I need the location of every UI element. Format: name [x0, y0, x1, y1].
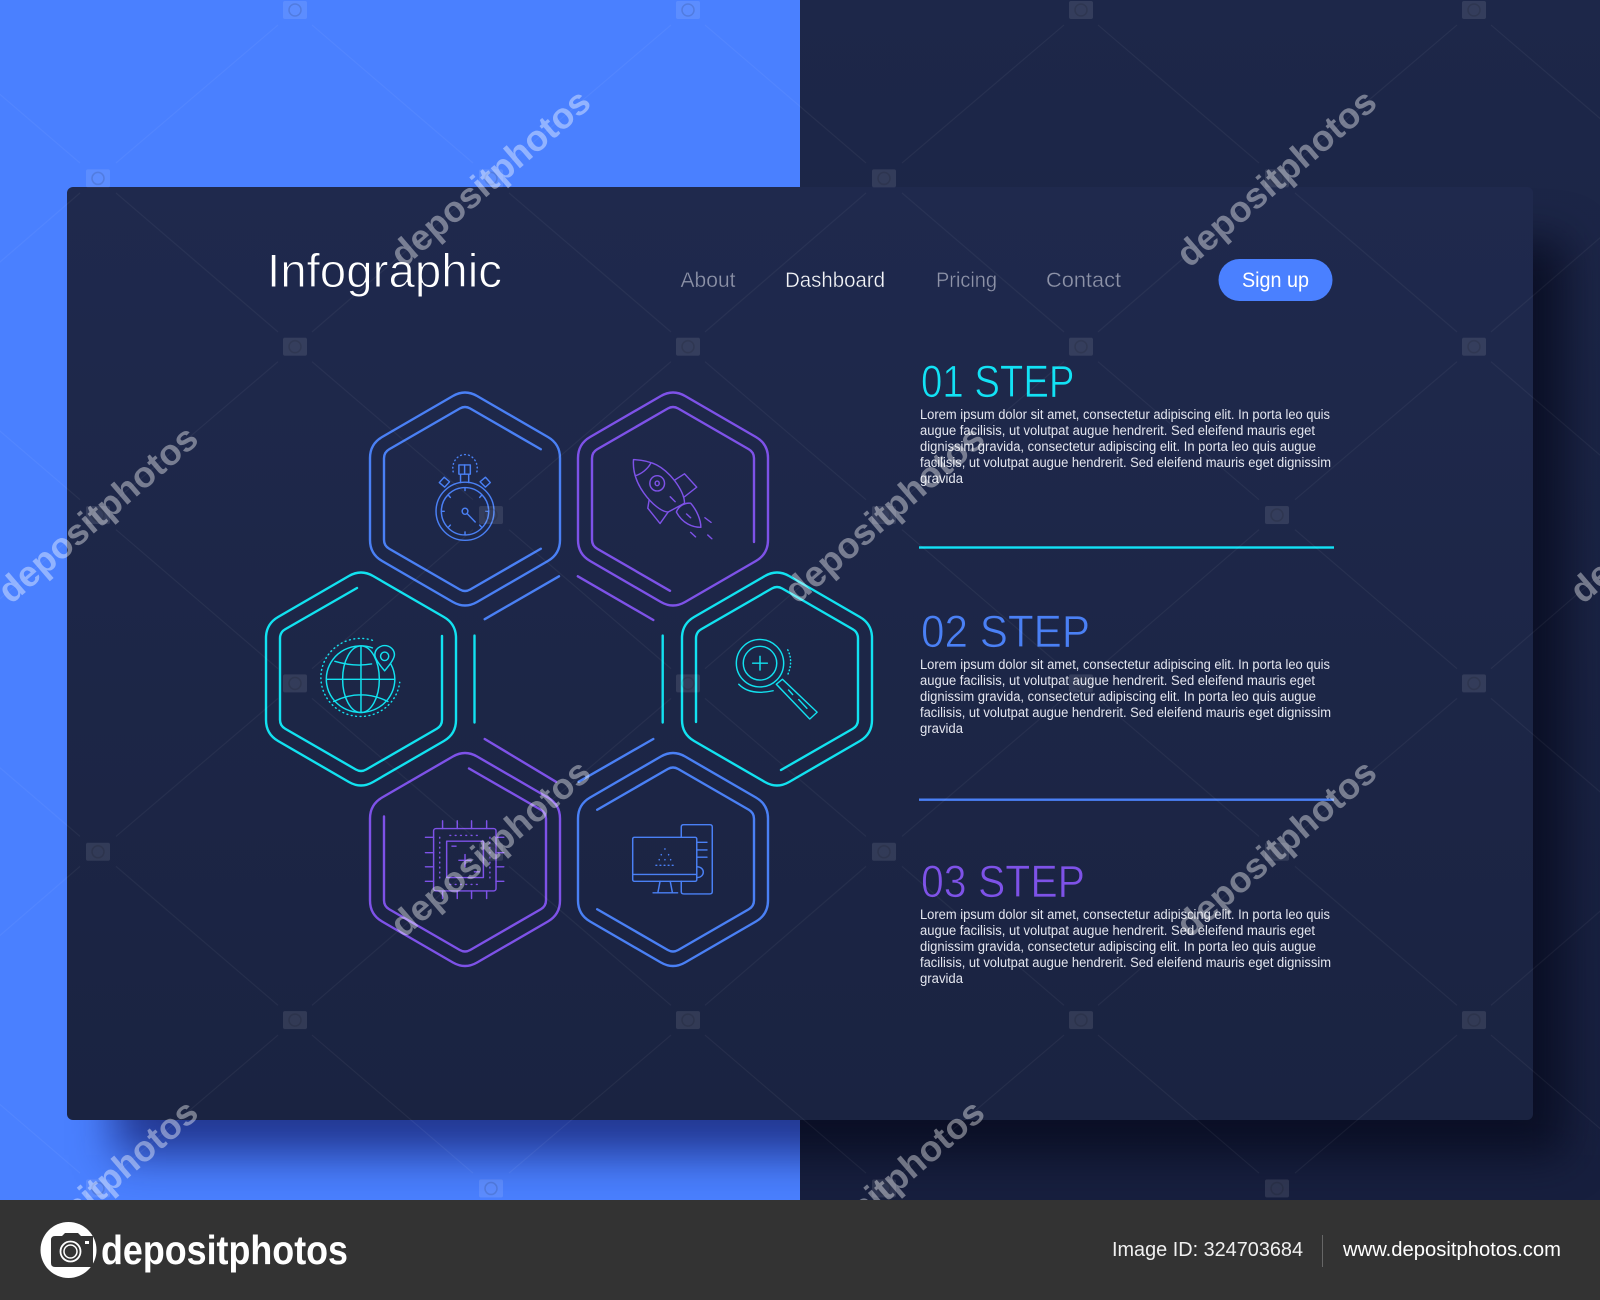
step 3: [920, 856, 1331, 986]
footer logo: [40, 1222, 348, 1278]
footer website: www.depositphotos.com: [1342, 1239, 1561, 1261]
background: dark right half: [800, 0, 1600, 1200]
button: sign up: Sign up: [1242, 269, 1309, 292]
central hexagon segments: [474, 576, 663, 782]
button: sign up: [1218, 259, 1332, 301]
watermark text: depositphotos: [382, 80, 598, 275]
step 1 heading: 01 STEP: [921, 356, 1074, 407]
footer image id: Image ID: 324703684: [1112, 1239, 1303, 1261]
step 2 body text: [920, 657, 1331, 736]
step 1 body text: dignissim gravida, consectetur adipiscing elit. In porta leo quis augue: [920, 439, 1316, 454]
step 2 body text: augue facilisis, ut volutpat augue hendrerit. Sed eleifend mauris eget: [920, 673, 1315, 688]
navigation: [680, 269, 1121, 292]
card shadow on dark: [800, 225, 1580, 1166]
navigation: Pricing: [936, 269, 997, 292]
step 3 body text: Lorem ipsum dolor sit amet, consectetur adipiscing elit. In porta leo quis: [920, 907, 1330, 922]
hexagon: magnifier (cyan): [682, 572, 872, 786]
divider: cyan: [919, 546, 1334, 549]
step 2 body text: gravida: [920, 721, 963, 736]
hexagon: rocket (purple): [578, 392, 768, 606]
hexagon: stopwatch (blue): [370, 392, 560, 606]
step 2: [920, 606, 1331, 736]
watermark text: depositphotos: [382, 751, 598, 945]
step 1: [920, 356, 1331, 486]
step 1 body text: Lorem ipsum dolor sit amet, consectetur adipiscing elit. In porta leo quis: [920, 407, 1330, 422]
step 2 body text: Lorem ipsum dolor sit amet, consectetur adipiscing elit. In porta leo quis: [920, 657, 1330, 672]
icons: [321, 455, 817, 899]
step 3 heading: 03 STEP: [921, 856, 1085, 907]
divider: blue: [919, 798, 1334, 801]
icon: stopwatch: [436, 455, 494, 540]
navigation: Contact: [1046, 269, 1121, 292]
step 2 body text: dignissim gravida, consectetur adipiscing elit. In porta leo quis augue: [920, 689, 1316, 704]
hexagon: computer (blue): [578, 753, 768, 966]
hexagon: chip (purple): [370, 753, 560, 966]
icon: rocket: [633, 460, 712, 539]
navigation: About: [680, 269, 736, 292]
step 1 body text: [920, 407, 1331, 486]
icon: chip: [425, 821, 504, 899]
title: Infographic: [267, 244, 502, 297]
step 3 body text: facilisis, ut volutpat augue hendrerit. Sed eleifend mauris eget dignissim: [920, 955, 1331, 970]
step 1 body text: gravida: [920, 471, 963, 486]
footer divider: [1322, 1235, 1323, 1267]
watermark text: depositphotos: [1168, 751, 1384, 945]
step 3 body text: dignissim gravida, consectetur adipiscing elit. In porta leo quis augue: [920, 939, 1316, 954]
navigation: Dashboard: [785, 269, 885, 292]
hexagon: globe (cyan): [266, 572, 456, 786]
step 2 heading: 02 STEP: [921, 606, 1090, 657]
watermark text: depositphotos: [776, 1091, 992, 1285]
panel: main card: [67, 187, 1533, 1120]
step 3 body text: gravida: [920, 971, 963, 986]
watermark text: depositphotos: [776, 417, 992, 611]
step 1 body text: facilisis, ut volutpat augue hendrerit. Sed eleifend mauris eget dignissim: [920, 455, 1331, 470]
hexagon diagram: [266, 392, 872, 966]
step 3 body text: [920, 907, 1331, 986]
watermark text: depositphotos: [1168, 80, 1384, 275]
background: blue left half: [0, 0, 800, 1200]
icon: globe with pin: [321, 638, 400, 716]
card shadow on blue: [86, 1120, 800, 1186]
footer logo: depositphotos: [101, 1227, 348, 1273]
step 1 body text: augue facilisis, ut volutpat augue hendrerit. Sed eleifend mauris eget: [920, 423, 1315, 438]
step 2 body text: facilisis, ut volutpat augue hendrerit. Sed eleifend mauris eget dignissim: [920, 705, 1331, 720]
icon: magnifier: [736, 639, 817, 719]
footer bar: [0, 1200, 1600, 1300]
icon: computer: [633, 825, 712, 894]
step 3 body text: augue facilisis, ut volutpat augue hendrerit. Sed eleifend mauris eget: [920, 923, 1315, 938]
